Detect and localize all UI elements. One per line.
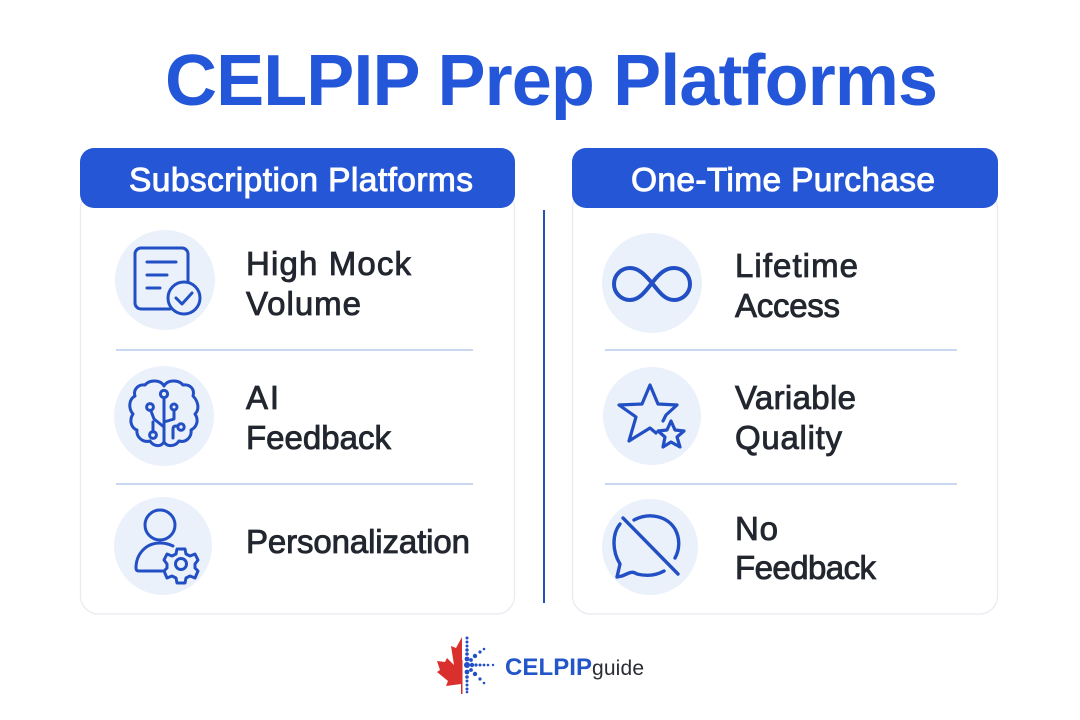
header: subscription platforms: Subscription Platforms xyxy=(129,162,473,199)
header: one-time purchase: One-Time Purchase xyxy=(631,162,935,199)
icon: AI brain xyxy=(114,366,214,466)
text: variable quality: Quality xyxy=(735,419,842,456)
text: lifetime access: Access xyxy=(735,287,840,324)
text: AI feedback: Feedback xyxy=(246,419,392,456)
icon: no feedback xyxy=(602,499,698,595)
icon: maple leaf with dots xyxy=(437,636,494,694)
center divider xyxy=(543,210,545,603)
header: subscription platforms xyxy=(80,148,515,208)
text: high mock volume: Volume xyxy=(246,285,361,322)
icon: document with check xyxy=(115,230,215,330)
panel: one-time purchase xyxy=(572,148,998,614)
text: lifetime access: Lifetime xyxy=(735,247,858,284)
text: personalization: Personalization xyxy=(246,523,470,560)
text: high mock volume: High Mock xyxy=(246,245,412,282)
header: one-time purchase xyxy=(572,148,998,208)
text: AI feedback: AI xyxy=(246,379,279,416)
panel: subscription platforms xyxy=(80,148,515,614)
logo: CELPIP guide: guide xyxy=(592,657,644,680)
icon: infinity xyxy=(602,233,702,333)
icon: stars xyxy=(603,367,701,465)
title: CELPIP Prep Platforms xyxy=(165,41,938,121)
text: variable quality: Variable xyxy=(735,379,856,416)
icon: person with gear xyxy=(114,497,212,595)
logo: CELPIP guide xyxy=(437,636,644,694)
text: no feedback: Feedback xyxy=(735,549,876,586)
text: no feedback: No xyxy=(735,510,778,547)
logo text: CELPIP xyxy=(505,654,592,681)
